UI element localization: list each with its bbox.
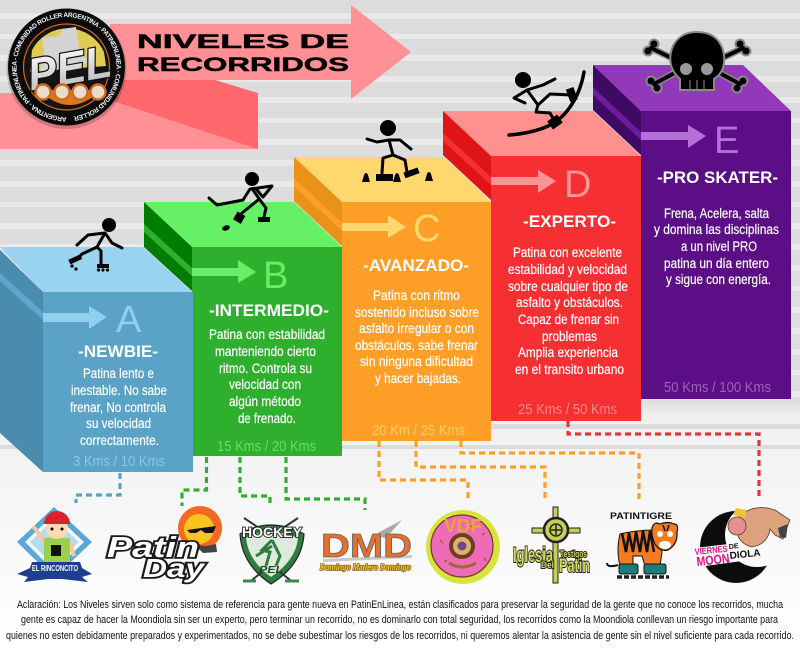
description E: y domina las disciplinas [654, 222, 779, 237]
logo: Patintigre: PATINTIGRE [610, 511, 672, 522]
icon: slalom skater C [362, 120, 433, 182]
logo: PEL badge: ARGENTINA - PATINENLINEA - COMUNIDAD ROLLER ARGENTINA - PATINENLINEA - COMUNIDAD ROLLER [12, 12, 122, 122]
title arrow [0, 5, 411, 149]
logo: Iglesia Testigos del Patin: Iglesia [513, 544, 553, 567]
description D: Capaz de frenar sin [518, 312, 619, 327]
logo: DMD: Domingo Madero Domingo [320, 562, 411, 572]
description E [654, 206, 779, 287]
heading A: -NEWBIE- [78, 342, 158, 361]
description E: a un nivel PRO [681, 239, 757, 254]
description C [355, 288, 479, 386]
description B: Patina con estabilidad [209, 327, 325, 342]
logo: Viernes de Moondiola: VIERNES [694, 544, 728, 557]
letter D: D [564, 164, 591, 206]
icon: ramp skater D [509, 72, 584, 135]
logo: DMD: DMD [321, 527, 412, 564]
logo: Hockey PEL: PEL [259, 565, 283, 576]
description D [508, 245, 628, 377]
description C: y hacer bajadas. [375, 371, 461, 386]
description C: sostenido incluso sobre [355, 305, 479, 320]
letter A: A [116, 299, 142, 341]
logo: Patin Day [107, 506, 222, 583]
description B: manteniendo cierto [215, 344, 316, 359]
distance C: 20 Km / 25 Kms [372, 422, 465, 439]
logo: VDF donut [426, 510, 500, 584]
logo: Patin Day: Patin [107, 532, 199, 564]
description A [70, 366, 167, 448]
description B: ritmo. Controla su [219, 361, 312, 376]
description D: asfalto y obstáculos. [516, 295, 623, 310]
panel: level D [443, 111, 641, 421]
logo: El Rinconcito: EL RINCONCITO [32, 563, 78, 573]
title [137, 31, 349, 76]
icon: skull and crossbones E [642, 32, 752, 94]
description D: en el transito urbano [515, 362, 624, 377]
logo: Viernes de Moondiola [694, 503, 790, 583]
distance E: 50 Kms / 100 Kms [664, 379, 771, 396]
description D: sobre cualquier tipo de [508, 279, 628, 294]
logo: VDF donut: VDF [444, 516, 482, 536]
title: RECORRIDOS [137, 54, 349, 76]
letter E: E [714, 120, 739, 162]
description D: estabilidad y velocidad [508, 262, 627, 277]
heading B: -INTERMEDIO- [209, 301, 329, 320]
logo: Viernes de Moondiola: MOON [696, 551, 730, 569]
logo: Hockey PEL: HOCKEY [242, 524, 303, 540]
logo: DMD [320, 520, 412, 572]
panel: level B [144, 202, 342, 456]
arrow A [43, 306, 107, 329]
logo: Iglesia Testigos del Patin: Patin [559, 556, 590, 577]
logo: Iglesia Testigos del Patin: Del [541, 560, 554, 570]
arrow C [342, 215, 406, 238]
logo: Patintigre [607, 511, 678, 577]
description C: asfalto irregular o con [359, 321, 474, 336]
description B: de frenado. [238, 411, 296, 426]
description E: y sigue con energía. [666, 272, 771, 287]
logo: El Rinconcito [17, 507, 92, 582]
description B: algún método [229, 394, 301, 409]
description A: correctamente. [80, 433, 159, 448]
arrow E [641, 125, 706, 148]
description A: Patina lento e [83, 366, 154, 381]
logo: Iglesia Testigos del Patin [513, 507, 590, 583]
logo: Hockey PEL [240, 518, 304, 584]
description C: sin ninguna dificultad [360, 354, 473, 369]
letter C: C [413, 208, 440, 250]
description A: su velocidad [86, 416, 151, 431]
panel: level C [294, 157, 491, 441]
logo: PEL badge: PEL [24, 36, 115, 100]
description C: Patina con ritmo [373, 288, 460, 303]
logo: Viernes de Moondiola: DE [728, 543, 739, 551]
title: NIVELES DE [137, 31, 349, 53]
distance B: 15 Kms / 20 Kms [217, 438, 316, 455]
distance D: 25 Kms / 50 Kms [518, 401, 617, 418]
heading E: -PRO SKATER- [657, 168, 778, 187]
description E: patina un día entero [664, 256, 769, 271]
description D: Amplia experiencia [518, 345, 618, 360]
disclaimer [6, 599, 794, 642]
panel: level E [593, 65, 791, 399]
heading D: -EXPERTO- [523, 212, 616, 231]
description B: velocidad con [229, 377, 301, 392]
distance A: 3 Kms / 10 Kms [73, 453, 165, 470]
description D: problemas [542, 329, 597, 344]
icon: skater A [68, 218, 122, 272]
icon: hockey player B [209, 172, 272, 232]
connector lines [76, 421, 759, 510]
arrow D [491, 170, 556, 193]
logo: Patin Day: Day [143, 553, 206, 583]
letter B: B [263, 255, 288, 297]
description D: Patina con excelente [513, 245, 622, 260]
description B [209, 327, 325, 426]
panel: level A [0, 247, 193, 472]
description A: frenar, No controla [70, 400, 166, 415]
logo: Viernes de Moondiola: DIOLA [729, 548, 761, 562]
description A: inestable. No sabe [71, 383, 167, 398]
arrow B [192, 260, 256, 283]
logo: Iglesia Testigos del Patin: Testigos [560, 549, 587, 559]
description C: obstáculos, sabe frenar [355, 338, 478, 353]
description E: Frena, Acelera, salta [664, 206, 769, 221]
heading C: -AVANZADO- [363, 256, 469, 275]
